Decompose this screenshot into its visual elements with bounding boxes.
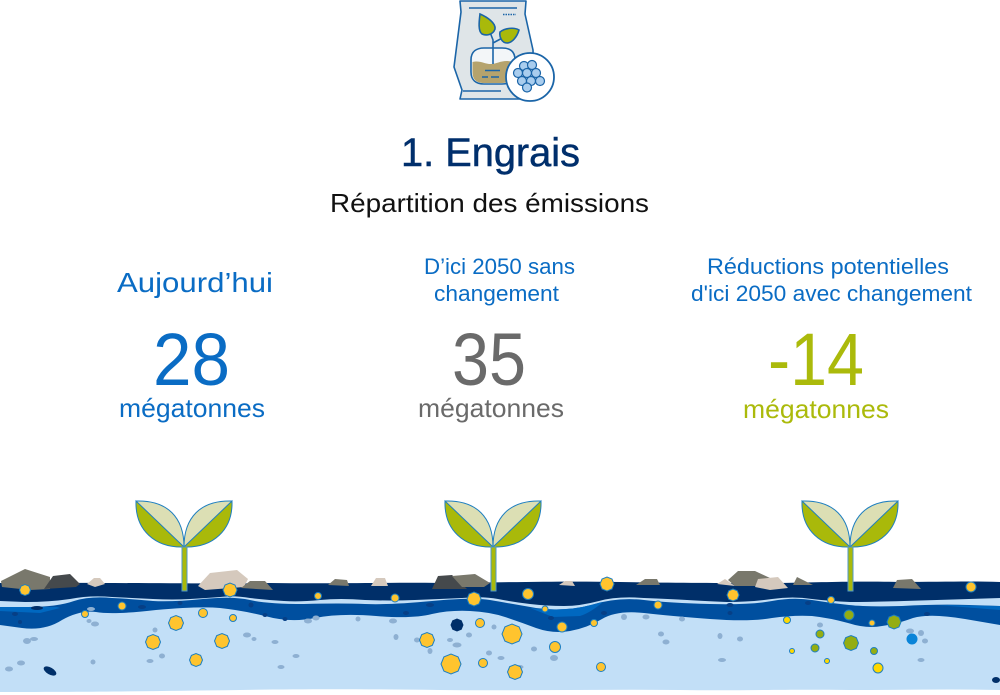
column: today	[117, 267, 273, 423]
dark stones	[31, 606, 1000, 683]
column: 2050 without change: D’ici 2050 sans	[424, 254, 575, 279]
column: 2050 with change: mégatonnes	[743, 394, 889, 424]
soil cross-section	[0, 582, 1000, 692]
column: today: mégatonnes	[119, 393, 265, 423]
rocks	[1, 569, 921, 590]
column: today: Aujourd’hui	[117, 267, 273, 298]
column: 2050 with change: -14	[768, 318, 864, 401]
column: 2050 with change: d'ici 2050 avec changement	[691, 281, 972, 306]
column: 2050 without change: mégatonnes	[418, 393, 564, 423]
soil: light lower layer	[0, 590, 1000, 692]
fertilizer granules	[20, 577, 976, 680]
icon: fertilizer bag	[454, 1, 554, 101]
column: 2050 without change: changement	[434, 281, 559, 306]
soil: mid-blue accents	[0, 602, 1000, 617]
title: 1. Engrais	[401, 131, 580, 175]
column: 2050 without change	[418, 254, 575, 423]
reduced granules: yellow	[784, 616, 883, 673]
column: 2050 with change	[691, 254, 972, 424]
subtitle: Répartition des émissions	[330, 188, 649, 218]
soil: navy topsoil	[0, 582, 1000, 606]
sprouts	[136, 501, 898, 591]
column: 2050 without change: 35	[452, 318, 526, 401]
column: 2050 with change: Réductions potentielles	[707, 254, 949, 279]
band stones	[12, 601, 930, 624]
column: today: 28	[153, 318, 230, 401]
soil: blue band	[0, 597, 1000, 632]
reduced granules: green	[811, 610, 901, 654]
pebbles	[5, 607, 928, 672]
blue granule	[906, 634, 918, 644]
navy granule	[450, 618, 464, 632]
